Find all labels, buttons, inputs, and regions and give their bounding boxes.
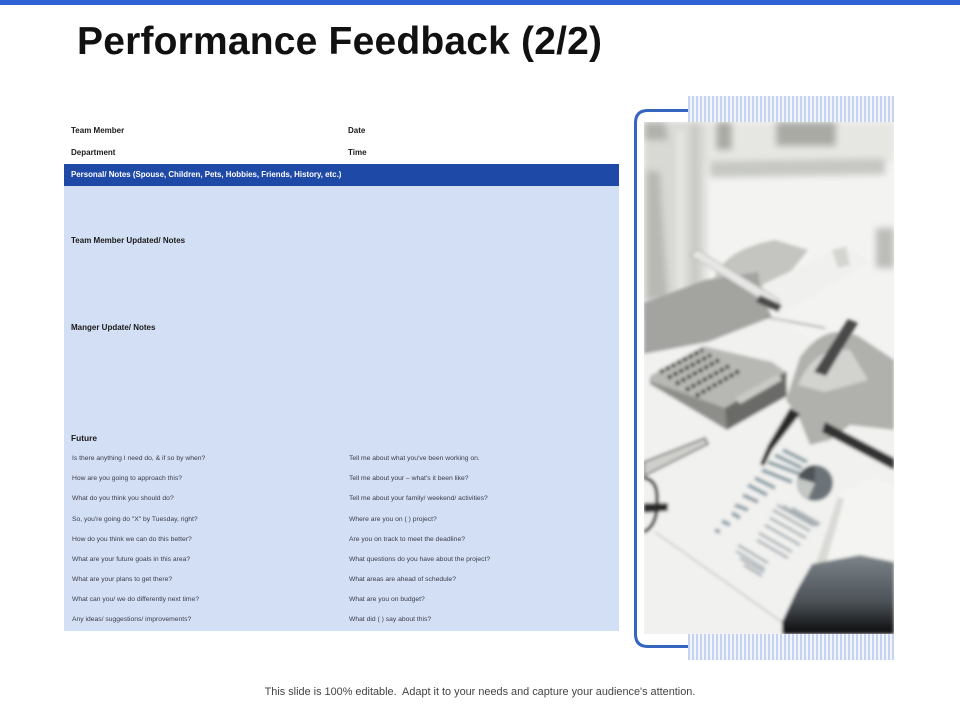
form label: time: Time: [348, 148, 367, 157]
blue bracket frame: [634, 109, 688, 648]
questions right column: What questions do you have about the project?: [349, 556, 490, 563]
personal notes header bar: [64, 164, 619, 186]
label: team member updated notes: Team Member Updated/ Notes: [71, 236, 185, 245]
title: Performance Feedback (2/2): [77, 20, 602, 63]
form label: date: Date: [348, 126, 365, 135]
questions left column: Is there anything I need do, & if so by when?: [72, 455, 205, 462]
questions left column: What do you think you should do?: [72, 495, 174, 502]
questions right column: What are you on budget?: [349, 596, 425, 603]
questions left column: How do you think we can do this better?: [72, 536, 192, 543]
striped decoration bottom: [688, 634, 894, 660]
questions left column: What are your future goals in this area?: [72, 556, 190, 563]
questions right column: What areas are ahead of schedule?: [349, 576, 456, 583]
notes background panel: [64, 186, 619, 631]
form label: team member: Team Member: [71, 126, 124, 135]
striped decoration top: [688, 96, 894, 122]
questions right column: Where are you on ( ) project?: [349, 516, 437, 523]
questions right column: [349, 455, 490, 623]
footer caption: This slide is 100% editable. Adapt it to your needs and capture your audience's attention.: [265, 686, 695, 698]
panel: feedback form table: [64, 126, 619, 631]
questions left column: What are your plans to get there?: [72, 576, 172, 583]
label: manager update notes: Manger Update/ Notes: [71, 323, 155, 332]
form label: department: Department: [71, 148, 115, 157]
questions left column: How are you going to approach this?: [72, 475, 182, 482]
questions left column: [72, 455, 205, 623]
questions right column: Tell me about your family/ weekend/ activities?: [349, 495, 488, 502]
top accent bar: [0, 0, 960, 5]
questions left column: Any ideas/ suggestions/ improvements?: [72, 616, 191, 623]
questions right column: Tell me about what you've been working on.: [349, 455, 480, 462]
questions right column: Are you on track to meet the deadline?: [349, 536, 465, 543]
questions right column: What did ( ) say about this?: [349, 616, 431, 623]
questions right column: Tell me about your – what's it been like?: [349, 475, 468, 482]
photo: hands working on charts with calculator: [644, 122, 894, 634]
label: future: Future: [71, 433, 97, 443]
personal notes header bar: Personal/ Notes (Spouse, Children, Pets, Hobbies, Friends, History, etc.): [71, 170, 341, 179]
questions left column: So, you're going do "X" by Tuesday, right?: [72, 516, 198, 523]
questions left column: What can you/ we do differently next time?: [72, 596, 199, 603]
